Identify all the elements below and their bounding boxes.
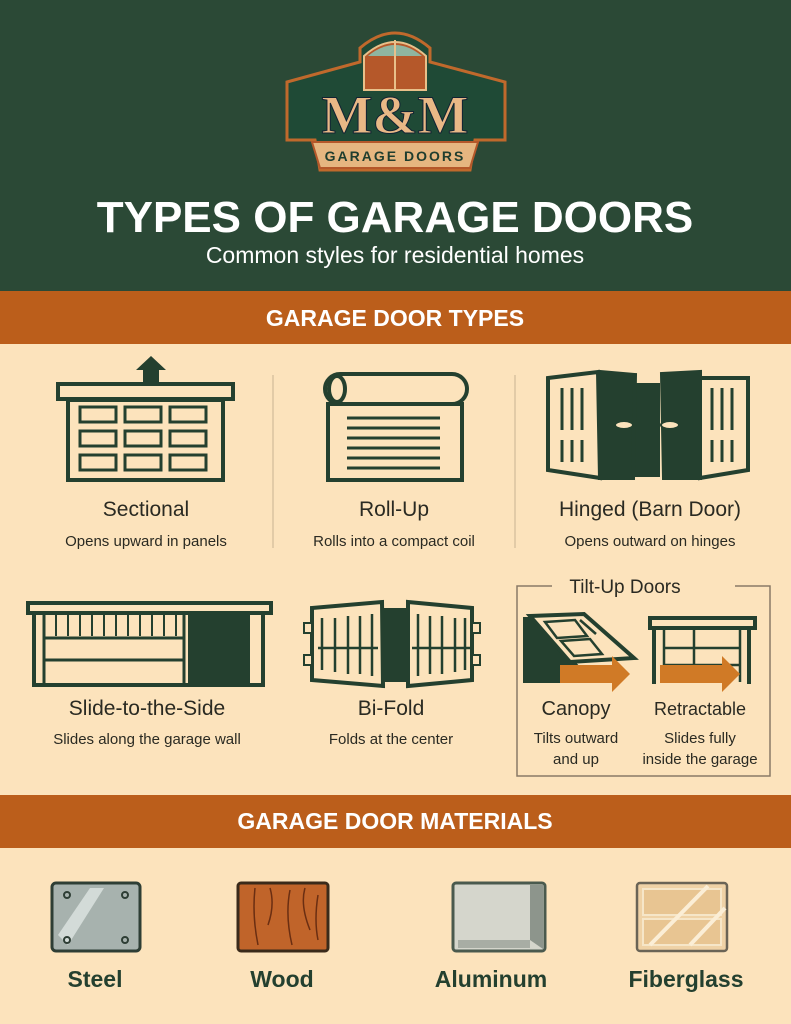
panel: tilt-up doors: Tilt-Up Doors [569,577,681,598]
panel: tilt-up doors: Retractable [654,699,746,719]
icon: slide-to-the-side [28,603,271,685]
label: hinged: Opens outward on hinges [565,533,735,550]
icon: aluminum [453,883,545,951]
icon: fiberglass [637,883,727,951]
icon: steel [52,883,140,951]
label: hinged: Hinged (Barn Door) [559,498,741,521]
panel: tilt-up doors: Tilts outward [534,730,618,747]
materials labels: Wood [250,966,314,992]
logo: M&M [322,85,468,145]
label: sectional [65,498,227,550]
label: bi-fold: Folds at the center [329,731,453,748]
materials labels: Steel [68,966,122,992]
materials labels [68,966,744,992]
label: bi-fold: Bi-Fold [358,697,424,720]
label: roll-up: Rolls into a compact coil [313,533,475,550]
panel: tilt-up doors: Canopy [542,698,610,720]
panel: tilt-up doors: inside the garage [642,751,758,768]
label: sectional: Sectional [103,498,189,521]
icon: roll-up [325,374,467,480]
label: slide-to-the-side: Slide-to-the-Side [69,697,225,720]
label: slide-to-the-side [53,697,241,748]
band: materials: GARAGE DOOR MATERIALS [237,808,553,834]
icon: hinged [548,372,748,478]
band: materials [0,795,791,848]
icon: sectional [58,356,233,480]
label: slide-to-the-side: Slides along the garage wall [53,731,241,748]
logo [287,33,505,170]
label: sectional: Opens upward in panels [65,533,227,550]
materials labels: Aluminum [435,966,547,992]
icon: canopy [524,614,634,692]
subtitle: Common styles for residential homes [206,242,584,268]
title: TYPES OF GARAGE DOORS [97,193,693,242]
header background [0,0,791,291]
label: roll-up [313,498,475,550]
label: hinged [559,498,741,550]
logo: GARAGE DOORS [325,148,465,164]
panel: tilt-up doors: and up [553,751,599,768]
panel: tilt-up doors [517,577,770,776]
icon: bi-fold [304,602,480,686]
icon: retractable [650,618,755,692]
panel: tilt-up doors: Slides fully [664,730,736,747]
icon: wood [238,883,328,951]
label: bi-fold [329,697,453,748]
band: types: GARAGE DOOR TYPES [266,305,524,331]
band: types [0,291,791,344]
label: roll-up: Roll-Up [359,498,429,521]
materials labels: Fiberglass [628,966,744,992]
